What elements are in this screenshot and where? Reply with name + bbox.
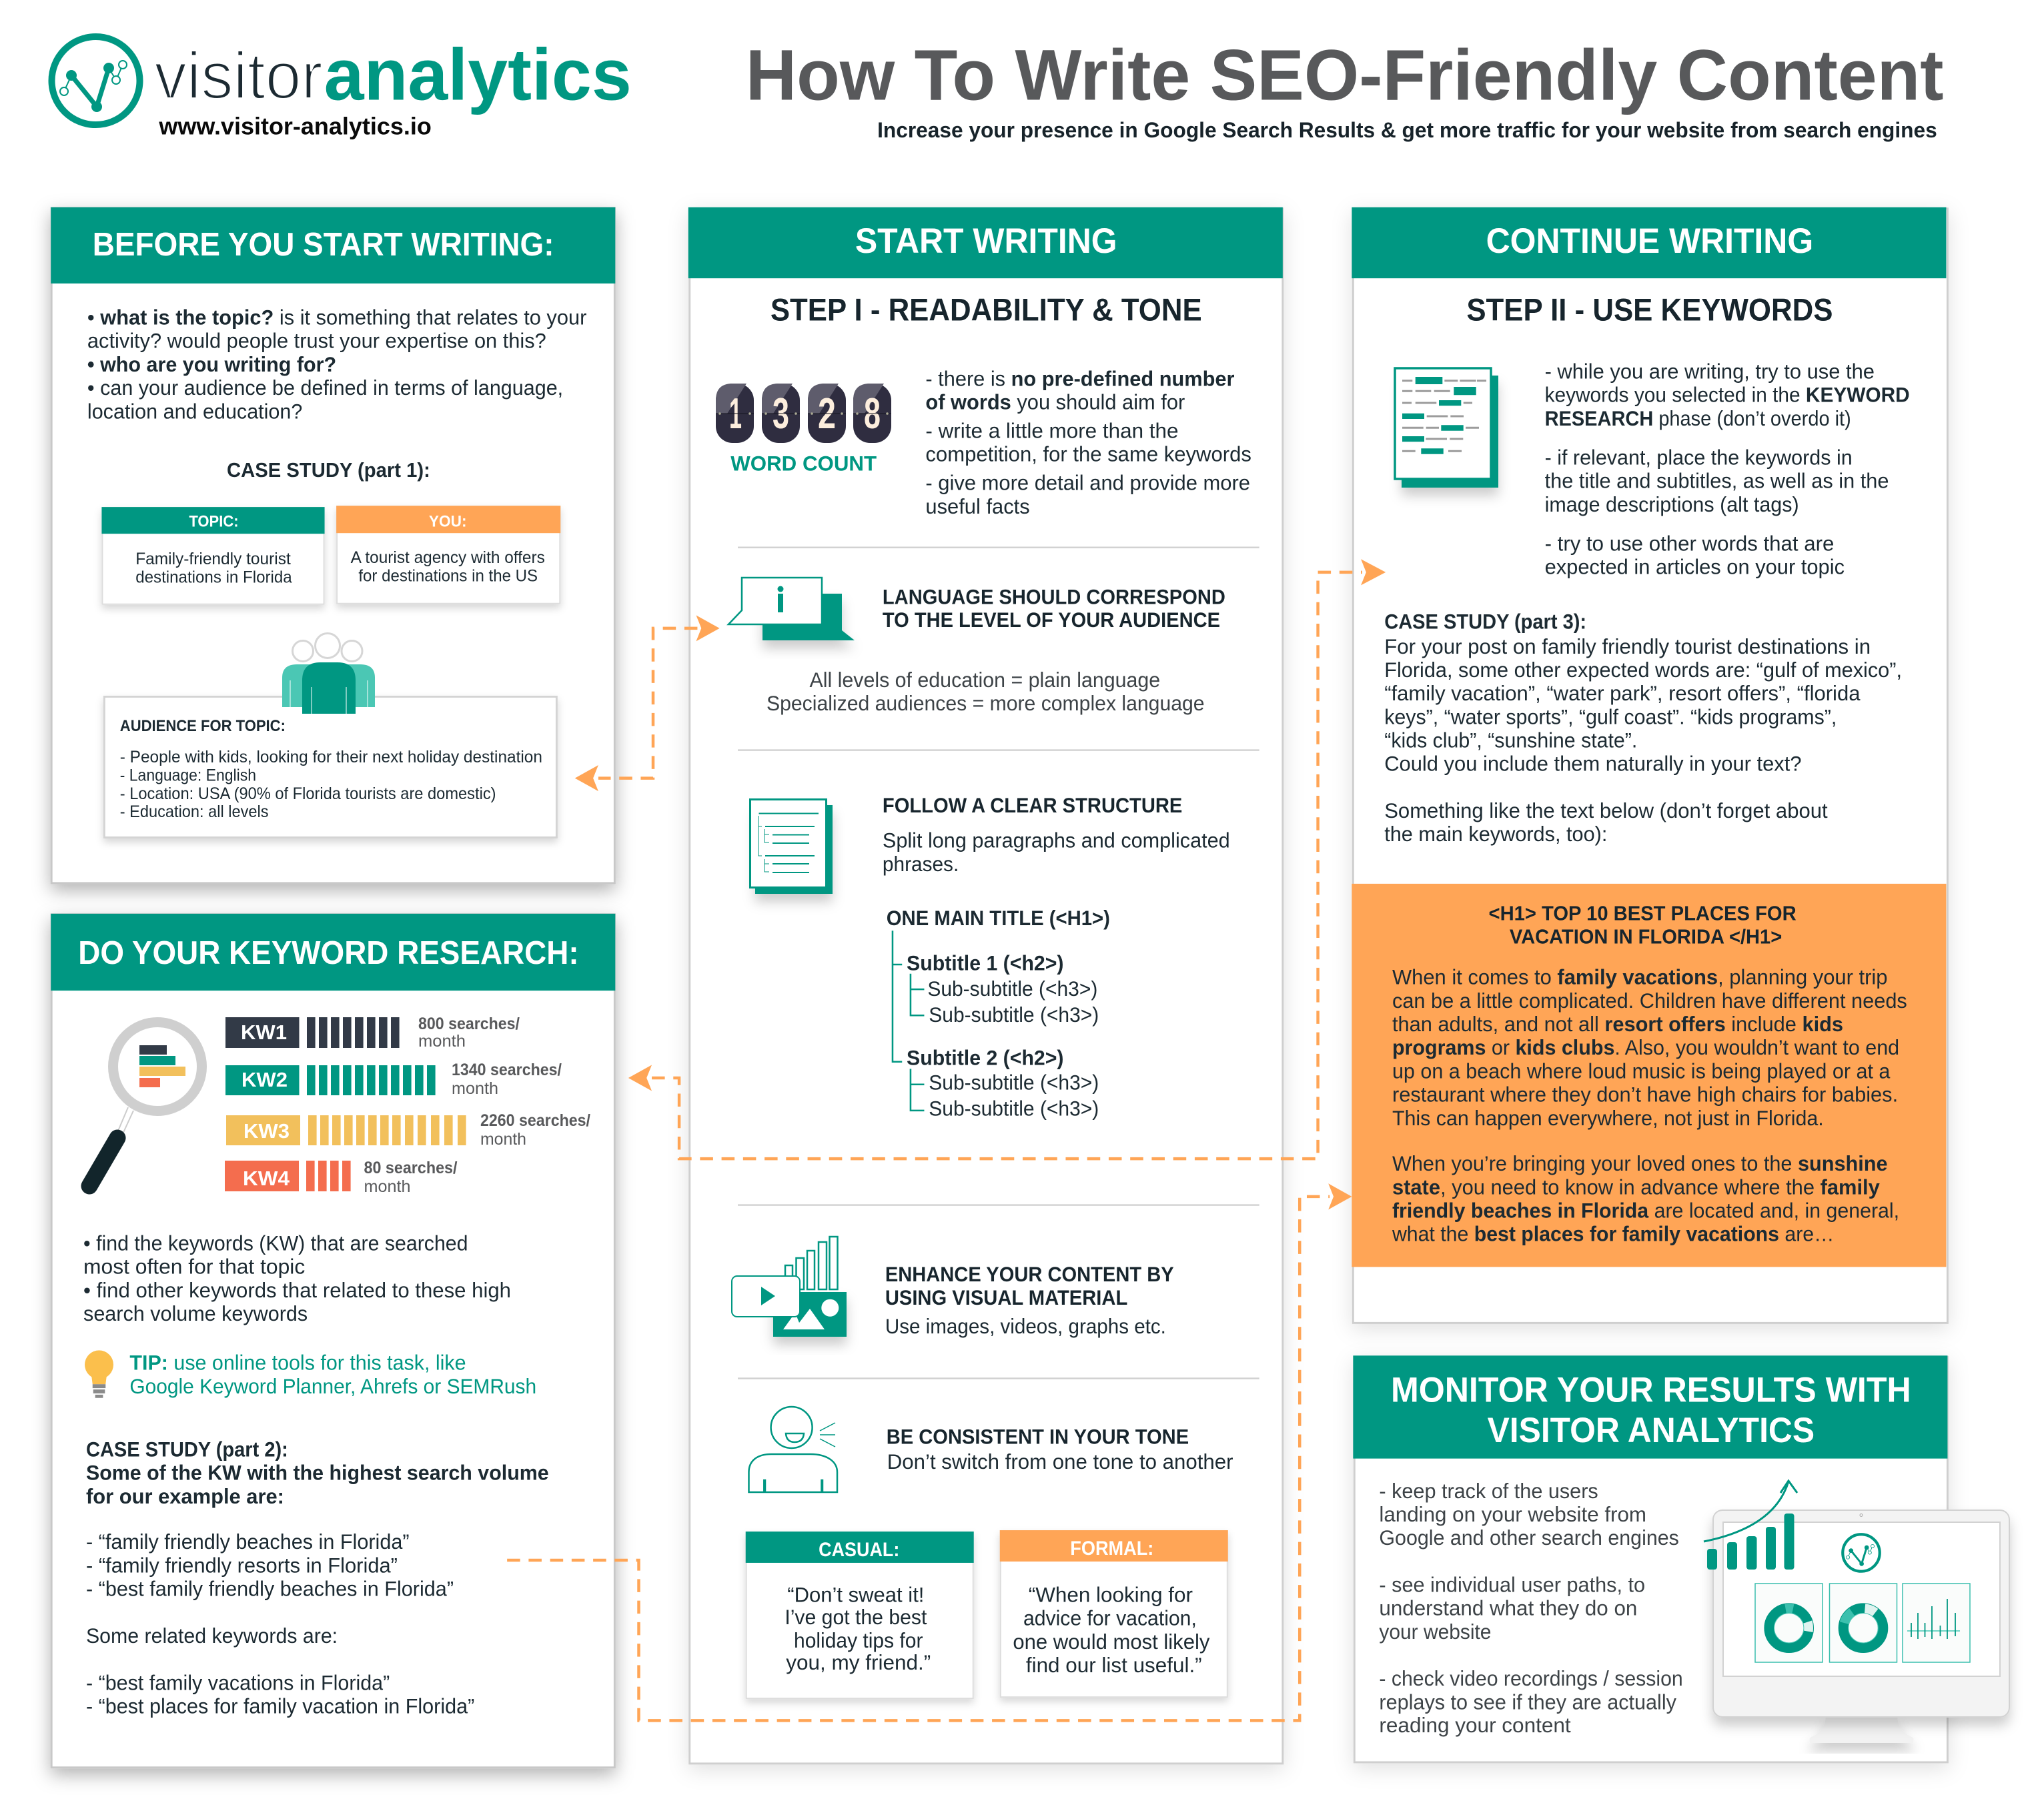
icon: magnifying glass bbox=[89, 1022, 202, 1186]
panel header: START WRITING bbox=[855, 221, 1117, 261]
logo on screen bbox=[1843, 1534, 1880, 1572]
case study heading part 1: CASE STUDY (part 1): bbox=[227, 460, 430, 482]
heading hierarchy tree: Subtitle 2 (<h2>) bbox=[907, 1046, 1064, 1069]
language heading: TO THE LEVEL OF YOUR AUDIENCE bbox=[883, 608, 1220, 632]
panel header: BEFORE YOU START WRITING: bbox=[93, 227, 554, 263]
arrow: keyword research to continue writing bbox=[628, 559, 1386, 1159]
line spike chart bbox=[1907, 1599, 1960, 1639]
case study part 2: for our example are: bbox=[86, 1485, 284, 1508]
intro questions bbox=[87, 306, 586, 423]
keyword advice: most often for that topic bbox=[83, 1255, 305, 1279]
formal card: find our list useful.” bbox=[1026, 1654, 1202, 1677]
tip text: Google Keyword Planner, Ahrefs or SEMRush bbox=[129, 1375, 536, 1398]
panel header: MONITOR YOUR RESULTS WITH bbox=[1391, 1371, 1911, 1410]
structure text bbox=[883, 829, 1230, 876]
you card: YOU: bbox=[429, 512, 467, 530]
logo: visitor analytics bbox=[52, 34, 632, 139]
icon: word count flip counter bbox=[716, 384, 891, 443]
donut chart 1 bbox=[1764, 1604, 1813, 1652]
audience card bbox=[104, 696, 556, 837]
intro questions: • can your audience be defined in terms of language, bbox=[87, 376, 563, 400]
orange example article: can be a little complicated. Children have different needs bbox=[1392, 989, 1907, 1013]
case study part 2: - “family friendly beaches in Florida” bbox=[86, 1530, 410, 1554]
panel header: VISITOR ANALYTICS bbox=[1488, 1411, 1815, 1450]
word count tips bbox=[925, 367, 1251, 518]
casual card: I’ve got the best bbox=[785, 1606, 927, 1629]
case study part 3: Could you include them naturally in your text? bbox=[1384, 752, 1802, 776]
logo wordmark: analytics bbox=[324, 34, 632, 115]
KW2 row: KW2 bbox=[241, 1068, 288, 1091]
keyword tips: - if relevant, place the keywords in bbox=[1545, 446, 1853, 469]
monitoring tips: landing on your website from bbox=[1379, 1503, 1646, 1526]
audience card: AUDIENCE FOR TOPIC: bbox=[120, 717, 286, 735]
case study part 2: - “best family friendly beaches in Florida” bbox=[86, 1578, 454, 1601]
icon: word count flip counter: 8 bbox=[864, 389, 881, 438]
formal card: “When looking for bbox=[1029, 1584, 1193, 1607]
panel: monitor your results bbox=[1353, 1355, 2009, 1762]
subtitle: Increase your presence in Google Search Results & get more traffic for your website from search engines bbox=[877, 118, 1937, 142]
heading hierarchy tree: Sub-subtitle (<h3>) bbox=[929, 1071, 1099, 1095]
case study part 3: “kids club”, “sunshine state”. bbox=[1384, 728, 1637, 752]
KW3 row bbox=[226, 1111, 590, 1149]
heading hierarchy tree: ONE MAIN TITLE (<H1>) bbox=[887, 907, 1110, 930]
orange example article bbox=[1352, 884, 1946, 1267]
step 2 heading: STEP II - USE KEYWORDS bbox=[1466, 293, 1833, 328]
audience card: - Language: English bbox=[120, 766, 256, 784]
KW3 row: month bbox=[480, 1130, 526, 1149]
KW1 row bbox=[225, 1015, 520, 1051]
visual heading: USING VISUAL MATERIAL bbox=[885, 1286, 1127, 1309]
formal card: FORMAL: bbox=[1070, 1538, 1153, 1560]
intro questions: • what is the topic? is it something that relates to your bbox=[87, 306, 586, 330]
heading hierarchy tree: Subtitle 1 (<h2>) bbox=[907, 951, 1064, 975]
heading hierarchy tree: Sub-subtitle (<h3>) bbox=[929, 1003, 1099, 1027]
logo wordmark bbox=[155, 34, 632, 115]
topic card: TOPIC: bbox=[189, 512, 239, 530]
word count tips: of words you should aim for bbox=[925, 391, 1185, 414]
icon: info speech bubbles bbox=[728, 578, 855, 640]
audience card: - People with kids, looking for their next holiday destination bbox=[120, 748, 542, 766]
tip text: TIP: use online tools for this task, like bbox=[129, 1351, 466, 1375]
panel header bbox=[51, 207, 615, 283]
heading hierarchy tree: Sub-subtitle (<h3>) bbox=[929, 1097, 1099, 1121]
growth bar chart bbox=[1707, 1514, 1794, 1570]
orange example article: When you’re bringing your loved ones to the sunshine bbox=[1392, 1152, 1888, 1175]
icon: document structure bbox=[750, 799, 833, 894]
KW2 row: month bbox=[452, 1079, 498, 1098]
you card bbox=[336, 506, 560, 604]
donut chart 2 bbox=[1839, 1604, 1888, 1652]
monitoring tips: reading your content bbox=[1379, 1714, 1571, 1737]
case study part 3: Something like the text below (don’t forget about bbox=[1384, 799, 1828, 822]
icon: light bulb bbox=[85, 1350, 113, 1398]
orange example article: friendly beaches in Florida are located and, in general, bbox=[1392, 1199, 1899, 1222]
icon: word count flip counter: 3 bbox=[773, 389, 789, 438]
intro questions: • who are you writing for? bbox=[87, 353, 336, 376]
dashboard cards bbox=[1755, 1584, 1970, 1662]
monitoring tips: - keep track of the users bbox=[1379, 1479, 1598, 1503]
keyword tips: the title and subtitles, as well as in the bbox=[1545, 470, 1889, 493]
casual card: you, my friend.” bbox=[786, 1651, 931, 1674]
KW2 row: 1340 searches/ bbox=[452, 1061, 562, 1079]
panel: do your keyword research bbox=[51, 914, 615, 1768]
tip text bbox=[129, 1351, 536, 1398]
panel header bbox=[688, 207, 1283, 278]
tone heading: BE CONSISTENT IN YOUR TONE bbox=[887, 1425, 1189, 1449]
word count tips: - write a little more than the bbox=[925, 420, 1178, 443]
keyword tips: - try to use other words that are bbox=[1545, 532, 1834, 555]
formal card: advice for vacation, bbox=[1023, 1607, 1197, 1630]
case study part 2: - “best family vacations in Florida” bbox=[86, 1671, 390, 1694]
KW3 row: KW3 bbox=[243, 1119, 290, 1143]
KW2 row bbox=[225, 1061, 562, 1098]
heading hierarchy tree bbox=[887, 907, 1110, 1121]
case study part 3: “family vacation”, “water park”, resort offers”, “florida bbox=[1384, 682, 1861, 705]
structure heading: FOLLOW A CLEAR STRUCTURE bbox=[883, 794, 1182, 817]
intro questions: activity? would people trust your expertise on this? bbox=[87, 330, 546, 353]
casual card bbox=[746, 1532, 974, 1698]
casual card: holiday tips for bbox=[794, 1629, 923, 1652]
icon: visual material bbox=[732, 1237, 847, 1337]
keyword tips: expected in articles on your topic bbox=[1545, 556, 1845, 579]
word count tips: useful facts bbox=[925, 495, 1030, 518]
keyword advice: • find other keywords that related to these high bbox=[83, 1279, 511, 1302]
KW4 row: KW4 bbox=[243, 1167, 290, 1190]
KW4 row bbox=[225, 1159, 458, 1196]
monitoring tips: your website bbox=[1379, 1620, 1491, 1644]
KW1 row: 800 searches/ bbox=[418, 1015, 520, 1033]
you card: for destinations in the US bbox=[358, 568, 538, 586]
monitoring tips: - see individual user paths, to bbox=[1379, 1574, 1645, 1597]
word count label: WORD COUNT bbox=[730, 452, 877, 475]
case study part 3: the main keywords, too): bbox=[1384, 822, 1607, 846]
structure text: Split long paragraphs and complicated bbox=[883, 829, 1230, 852]
keyword tips: - while you are writing, try to use the bbox=[1545, 360, 1875, 383]
intro questions: location and education? bbox=[87, 400, 302, 423]
case study part 2: CASE STUDY (part 2): bbox=[86, 1437, 288, 1461]
keyword tips: image descriptions (alt tags) bbox=[1545, 493, 1799, 516]
casual card: CASUAL: bbox=[819, 1539, 899, 1561]
logo wordmark: visitor bbox=[155, 39, 323, 113]
formal card bbox=[1000, 1530, 1228, 1697]
language text: Specialized audiences = more complex language bbox=[766, 692, 1205, 715]
step 1 heading: STEP I - READABILITY & TONE bbox=[771, 293, 1202, 328]
panel header bbox=[1352, 207, 1946, 278]
icon: word count flip counter: 2 bbox=[818, 389, 836, 438]
language text bbox=[766, 668, 1205, 715]
keyword advice: search volume keywords bbox=[83, 1302, 308, 1325]
orange example article: When it comes to family vacations, planning your trip bbox=[1392, 966, 1888, 989]
arrow: case study to orange example bbox=[507, 1183, 1352, 1720]
monitoring tips: Google and other search engines bbox=[1379, 1526, 1679, 1550]
title: How To Write SEO-Friendly Content bbox=[746, 35, 1944, 115]
KW3 row: 2260 searches/ bbox=[480, 1111, 590, 1130]
audience card: - Location: USA (90% of Florida tourists are domestic) bbox=[120, 785, 496, 803]
website url: www.visitor-analytics.io bbox=[158, 112, 432, 139]
tone text: Don’t switch from one tone to another bbox=[887, 1450, 1233, 1473]
language heading bbox=[883, 586, 1225, 632]
panel header: CONTINUE WRITING bbox=[1486, 221, 1813, 261]
visual heading: ENHANCE YOUR CONTENT BY bbox=[885, 1263, 1174, 1286]
keyword tips: keywords you selected in the KEYWORD bbox=[1545, 384, 1910, 407]
orange example article: state, you need to know in advance where the family bbox=[1392, 1175, 1880, 1199]
case study part 3: CASE STUDY (part 3): bbox=[1384, 610, 1586, 634]
formal card: one would most likely bbox=[1013, 1630, 1210, 1654]
logo mark bbox=[52, 37, 140, 125]
heading hierarchy tree: Sub-subtitle (<h3>) bbox=[927, 977, 1097, 1001]
visual text: Use images, videos, graphs etc. bbox=[885, 1315, 1166, 1338]
orange example article: restaurant where they don’t have high chairs for babies. bbox=[1392, 1083, 1898, 1107]
panel header bbox=[1353, 1355, 1947, 1459]
language heading: LANGUAGE SHOULD CORRESPOND bbox=[883, 586, 1225, 609]
language text: All levels of education = plain language bbox=[809, 668, 1160, 692]
case study part 2: - “family friendly resorts in Florida” bbox=[86, 1554, 398, 1577]
topic card bbox=[101, 507, 325, 604]
case study part 2: Some of the KW with the highest search volume bbox=[86, 1461, 549, 1485]
orange example article: what the best places for family vacations are… bbox=[1392, 1223, 1834, 1246]
audience card: - Education: all levels bbox=[120, 803, 269, 821]
keyword tips: RESEARCH phase (don’t overdo it) bbox=[1545, 407, 1851, 430]
KW4 row: month bbox=[364, 1177, 411, 1196]
topic card: destinations in Florida bbox=[135, 568, 292, 586]
keyword advice bbox=[83, 1232, 511, 1325]
monitoring tips: understand what they do on bbox=[1379, 1597, 1637, 1620]
growth arrow bbox=[1704, 1481, 1797, 1542]
panel header bbox=[51, 914, 615, 991]
case study part 3: keys”, “water sports”, “gulf coast”. “kids programs”, bbox=[1384, 705, 1837, 728]
orange example article: up on a beach where loud music is being played or at a bbox=[1392, 1059, 1891, 1083]
keyword advice: • find the keywords (KW) that are searched bbox=[83, 1232, 468, 1255]
case study part 3: Florida, some other expected words are: “gulf of mexico”, bbox=[1384, 658, 1902, 682]
visual heading bbox=[885, 1263, 1174, 1309]
orange example article: <H1> TOP 10 BEST PLACES FOR bbox=[1489, 903, 1797, 925]
case study part 3 bbox=[1384, 610, 1902, 846]
monitor illustration bbox=[1704, 1481, 2009, 1743]
case study part 3: For your post on family friendly tourist destinations in bbox=[1384, 635, 1871, 658]
monitoring tips: replays to see if they are actually bbox=[1379, 1690, 1676, 1714]
KW1 row: month bbox=[418, 1032, 466, 1051]
orange example article: VACATION IN FLORIDA </H1> bbox=[1510, 927, 1782, 949]
panel: before you start writing bbox=[51, 207, 615, 883]
panel: start writing bbox=[688, 207, 1283, 1764]
panel: continue writing bbox=[1352, 207, 1947, 1323]
icon: keyword document bbox=[1395, 368, 1498, 488]
casual card: “Don’t sweat it! bbox=[787, 1584, 924, 1607]
orange example article: than adults, and not all resort offers include kids bbox=[1392, 1013, 1843, 1036]
orange example article: This can happen everywhere, not just in Florida. bbox=[1392, 1107, 1824, 1130]
keyword bar chart bbox=[225, 1015, 590, 1196]
arrow: audience to language bbox=[575, 615, 720, 791]
icon: audience people bbox=[282, 633, 375, 714]
icon: word count flip counter: 1 bbox=[729, 389, 742, 438]
case study part 2: Some related keywords are: bbox=[86, 1624, 338, 1648]
monitoring tips bbox=[1379, 1479, 1683, 1737]
case study part 2 bbox=[86, 1437, 549, 1718]
KW4 row: 80 searches/ bbox=[364, 1159, 458, 1177]
KW1 row: KW1 bbox=[241, 1021, 287, 1044]
keyword tips bbox=[1545, 360, 1910, 579]
icon: speaking person bbox=[749, 1407, 837, 1492]
structure text: phrases. bbox=[883, 852, 959, 876]
word count tips: - give more detail and provide more bbox=[925, 472, 1250, 495]
panel header: DO YOUR KEYWORD RESEARCH: bbox=[78, 935, 579, 971]
orange example article: programs or kids clubs. Also, you wouldn’t want to end bbox=[1392, 1036, 1899, 1059]
word count tips: - there is no pre-defined number bbox=[925, 367, 1235, 390]
word count tips: competition, for the same keywords bbox=[925, 443, 1251, 466]
you card: A tourist agency with offers bbox=[351, 549, 545, 567]
topic card: Family-friendly tourist bbox=[135, 550, 291, 568]
case study part 2: - “best places for family vacation in Florida” bbox=[86, 1694, 474, 1718]
monitoring tips: - check video recordings / session bbox=[1379, 1667, 1683, 1690]
